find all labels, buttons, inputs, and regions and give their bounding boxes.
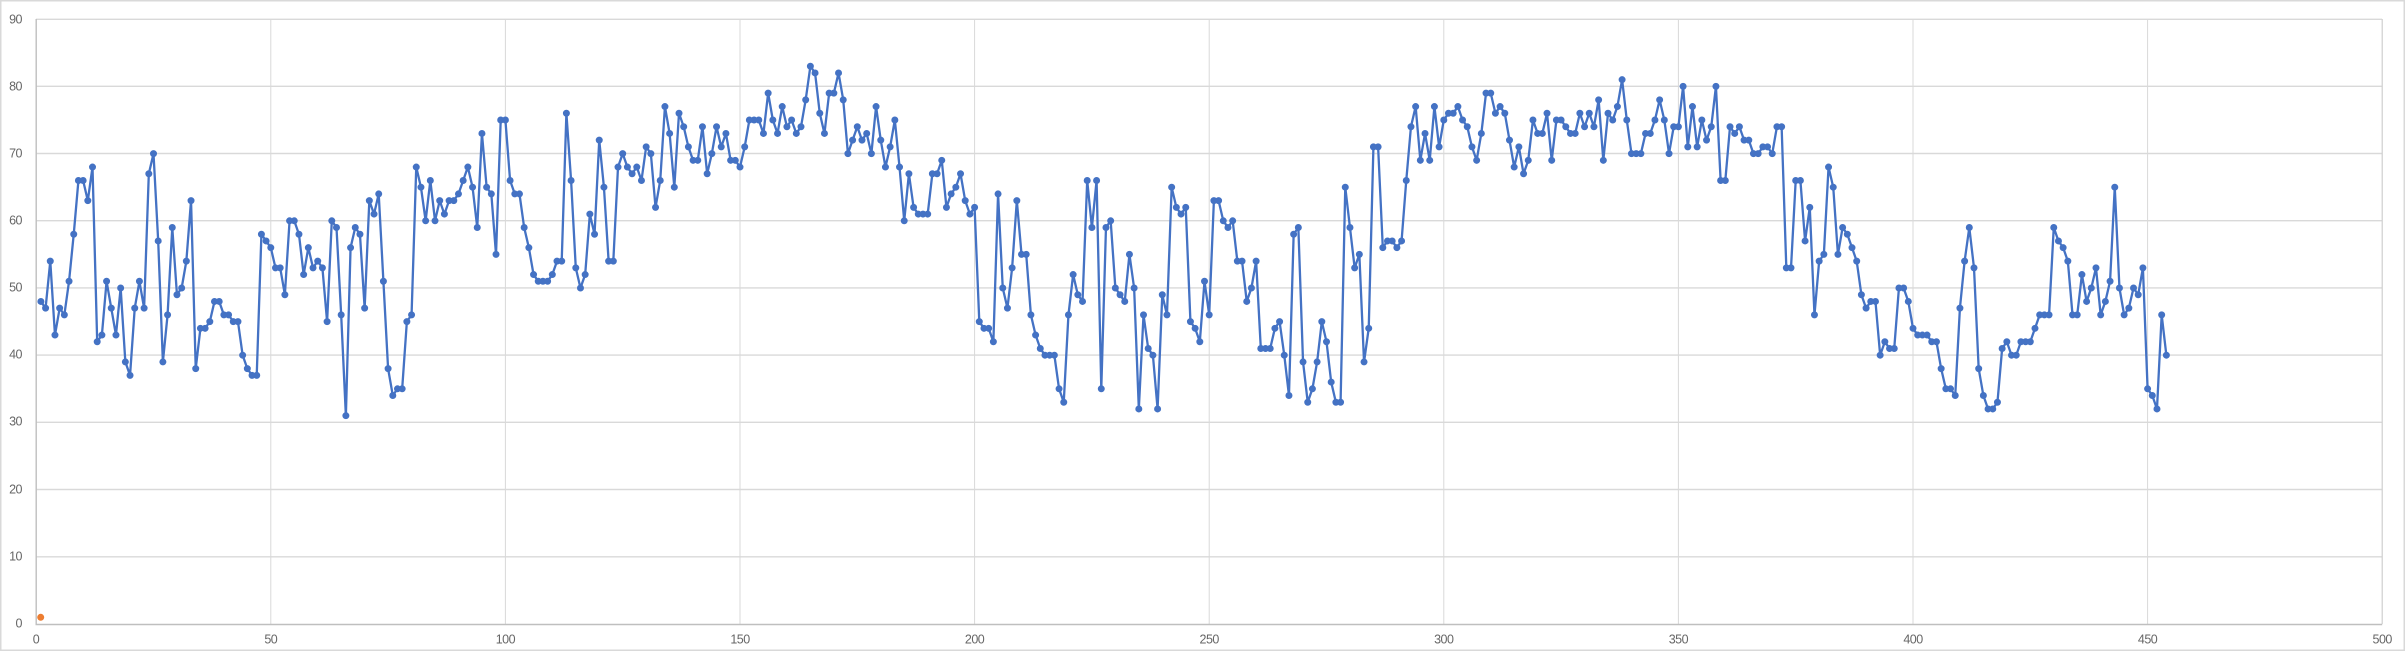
y axis labels: 20	[9, 482, 23, 496]
y axis labels: 50	[9, 280, 23, 294]
x axis labels: 450	[2138, 632, 2158, 646]
y axis labels: 30	[9, 414, 23, 428]
x axis labels: 500	[2373, 632, 2392, 646]
y axis labels: 0	[16, 616, 23, 630]
y axis labels	[9, 12, 23, 630]
y axis labels: 40	[9, 348, 23, 362]
y axis labels: 60	[9, 214, 23, 228]
x axis labels: 150	[730, 632, 750, 646]
x axis labels: 0	[33, 632, 40, 646]
y axis labels: 80	[9, 80, 23, 94]
x axis labels: 400	[1903, 632, 1923, 646]
y axis labels: 10	[9, 550, 23, 564]
series: blue line with markers	[41, 66, 2166, 416]
x axis labels: 50	[264, 632, 278, 646]
x axis labels: 350	[1669, 632, 1689, 646]
x axis labels: 300	[1434, 632, 1454, 646]
x axis labels: 250	[1200, 632, 1219, 646]
x axis labels: 200	[965, 632, 985, 646]
y axis labels: 70	[9, 146, 23, 160]
x axis labels: 100	[496, 632, 516, 646]
series: orange single point	[37, 614, 44, 621]
x axis labels	[33, 632, 2392, 646]
y axis labels: 90	[9, 12, 23, 26]
